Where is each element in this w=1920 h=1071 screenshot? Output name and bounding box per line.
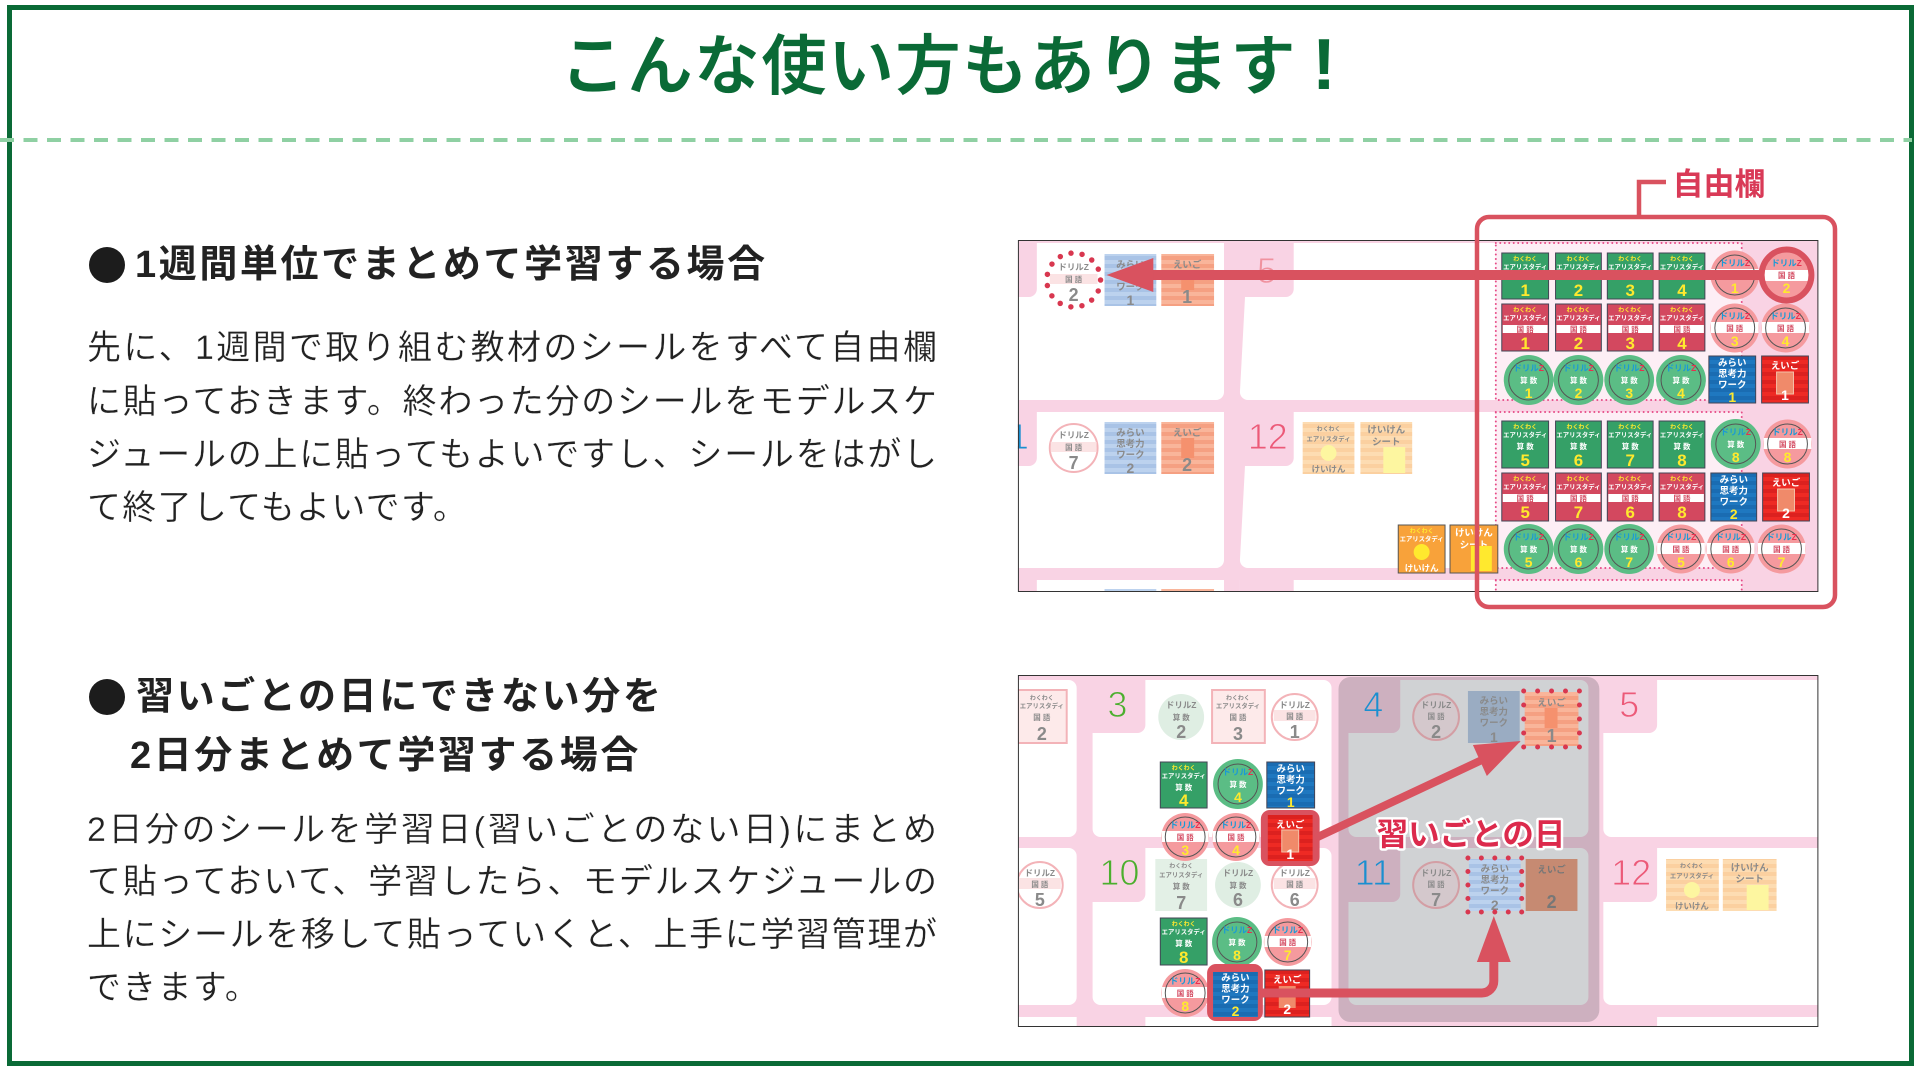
stickers row 3: green circles, blue and red: ドリルZ <box>1513 363 1544 373</box>
heading text line 2: 2日分まとめて学習する場合 <box>130 735 641 777</box>
heading text: 1週間単位でまとめて学習する場合 <box>135 244 768 286</box>
faded stickers row 1: 算 数 <box>1173 712 1190 722</box>
faded stickers in lesson day: 思考力 <box>1480 706 1508 718</box>
stickers moved: week 2: 算 数 <box>1228 937 1246 947</box>
faded stickers row 2: エアリスタディ <box>1670 871 1714 880</box>
stickers row 5: 国 語 <box>1622 494 1639 503</box>
stickers row 2: red workbook japanese: ドリルZ <box>1770 311 1801 321</box>
section 2 body text: できます。 <box>87 969 260 1007</box>
stickers row 2: red workbook japanese: 国 語 <box>1622 325 1639 334</box>
stickers moved: week 1: ドリルZ <box>1223 767 1253 777</box>
stickers row 4: 5 <box>1520 451 1530 470</box>
stickers row 2: red workbook japanese: エアリスタディ <box>1660 313 1704 322</box>
faded stickers row 1 <box>1018 690 1318 744</box>
faded stickers in lesson day: 国 語 <box>1428 712 1445 721</box>
stickers row 5 <box>1502 473 1809 522</box>
stickers moved: week 1: ワーク <box>1277 786 1305 797</box>
section 1 body text: に貼っておきます。終わった分のシールをモデルスケ <box>87 383 937 421</box>
faded stickers row 2 <box>1017 859 1777 913</box>
stickers row 4: ドリルZ <box>1720 427 1751 437</box>
faded stickers row 2: エアリスタディ <box>1159 870 1203 879</box>
stickers row 6: 算 数 <box>1520 544 1538 554</box>
faded stickers on schedule: ワーク <box>1116 450 1145 461</box>
section 1 body text <box>87 329 937 527</box>
title: こんな使い方もあります <box>560 29 1297 103</box>
stickers row 4: ドリルZ <box>1772 427 1803 437</box>
faded stickers row 1: わくわく <box>1030 694 1054 702</box>
faded stickers on schedule: 2 <box>1182 455 1192 475</box>
stickers row 5: わくわく <box>1567 475 1590 483</box>
stickers row 6: ドリルZ <box>1563 532 1594 542</box>
stickers moved: week 1: 算 数 <box>1229 779 1247 789</box>
stickers moved: week 2: 思考力 <box>1221 983 1250 995</box>
stickers row 3: green circles, blue and red: 1 <box>1781 387 1789 403</box>
stickers moved: week 2: 2 <box>1232 1003 1240 1019</box>
stickers row 4: 算 数 <box>1727 439 1745 449</box>
stickers row 1: green workbook math: エアリスタディ <box>1556 262 1600 271</box>
stickers row 5: わくわく <box>1670 475 1694 483</box>
stickers row 6: ドリルZ <box>1614 532 1644 542</box>
stickers row 2: red workbook japanese: わくわく <box>1567 306 1590 314</box>
faded stickers in lesson day: 2 <box>1491 897 1499 913</box>
faded stickers row 2: シート <box>1736 874 1764 885</box>
stickers row 3: green circles, blue and red: ドリルZ <box>1614 363 1644 373</box>
faded stickers on schedule: みらい <box>1116 428 1145 439</box>
faded stickers row 1: エアリスタディ <box>1216 701 1260 710</box>
stickers moved: week 2: わくわく <box>1172 920 1196 928</box>
faded stickers in lesson day: えいご <box>1537 697 1566 709</box>
stickers row 4: 算 数 <box>1517 441 1534 451</box>
faded stickers in lesson day: 1 <box>1490 729 1498 745</box>
stickers row 2: red workbook japanese: 国 語 <box>1570 325 1587 334</box>
stickers row 2: red workbook japanese: 1 <box>1520 334 1530 353</box>
stickers row 1: green workbook math: 2 <box>1574 281 1583 300</box>
stickers row 6: ドリルZ <box>1513 532 1544 542</box>
faded stickers row 2: 6 <box>1290 890 1300 910</box>
arrow: diagonal to lesson sticker 1 <box>1316 741 1521 838</box>
faded stickers row 2: けいけん <box>1731 863 1769 874</box>
stickers row 3: green circles, blue and red: 3 <box>1625 385 1633 401</box>
faded stickers row 2: 5 <box>1035 890 1045 910</box>
stickers row 5: エアリスタディ <box>1503 482 1547 491</box>
stickers row 4: 算 数 <box>1673 441 1691 451</box>
stickers row 1: green workbook math: エアリスタディ <box>1503 262 1547 271</box>
stickers row 6: 6 <box>1575 554 1583 570</box>
stickers row 2: red workbook japanese: わくわく <box>1670 306 1694 314</box>
stickers row 3: green circles, blue and red <box>1504 355 1808 405</box>
stickers row 6: 国 語 <box>1722 545 1740 554</box>
faded stickers in lesson day: ワーク <box>1480 718 1508 729</box>
faded stickers on schedule: わくわく <box>1317 425 1340 433</box>
stickers row 4: わくわく <box>1567 423 1590 431</box>
stickers moved: week 1: 国 語 <box>1227 833 1245 842</box>
stickers row 3: green circles, blue and red: 1 <box>1728 389 1736 405</box>
stickers moved: week 2: エアリスタディ <box>1162 927 1206 936</box>
faded stickers on schedule: エアリスタディ <box>1307 434 1351 443</box>
bullet <box>89 247 125 283</box>
section 1 body text: て終了してもよいです。 <box>87 489 468 527</box>
faded stickers row 2: 算 数 <box>1229 880 1247 890</box>
section 1 heading <box>89 244 768 286</box>
stickers row 4: エアリスタディ <box>1660 430 1704 439</box>
faded stickers on schedule: えいご <box>1173 427 1202 439</box>
stickers row 4 <box>1502 419 1812 470</box>
stickers row 5: えいご <box>1772 477 1801 489</box>
stickers row 4: わくわく <box>1670 423 1694 431</box>
stickers row 1: green workbook math: エアリスタディ <box>1660 262 1704 271</box>
stickers row 4: 7 <box>1626 451 1635 470</box>
panel: schedule with lesson day <box>1000 675 1826 1030</box>
stickers moved: week 1: わくわく <box>1172 764 1196 772</box>
stickers row 3: green circles, blue and red: 1 <box>1525 385 1533 401</box>
stickers row 3: green circles, blue and red: ドリルZ <box>1563 363 1594 373</box>
stickers row 2: red workbook japanese: エアリスタディ <box>1503 313 1547 322</box>
faded stickers row 2: 国 語 <box>1031 880 1049 889</box>
stickers row 3: green circles, blue and red: えいご <box>1771 360 1800 372</box>
faded stickers row 2: わくわく <box>1169 862 1193 870</box>
stickers moved: week 2: ドリルZ <box>1222 925 1252 935</box>
faded stickers in lesson day: えいご <box>1537 864 1566 876</box>
faded stickers in lesson day: 2 <box>1547 892 1557 912</box>
orange experience stickers: シート <box>1460 540 1488 551</box>
date numbers <box>1100 684 1651 893</box>
stickers row 2: red workbook japanese: 3 <box>1731 333 1739 349</box>
stickers row 4: エアリスタディ <box>1608 430 1652 439</box>
stickers row 3: green circles, blue and red: 算 数 <box>1621 375 1638 385</box>
orange experience stickers: けいけん <box>1455 528 1493 539</box>
section 2 body text: 2日分のシールを学習日(習いごとのない日)にまとめ <box>87 811 937 849</box>
stickers row 1: green workbook math: 国 語 <box>1778 271 1796 280</box>
date numbers: 1 <box>1009 416 1029 457</box>
date numbers: 4 <box>1363 684 1383 725</box>
stickers moved: week 1: えいご <box>1276 819 1305 831</box>
faded stickers row 2: ドリルZ <box>1223 868 1253 878</box>
date numbers <box>1018 258 1286 449</box>
faded stickers in lesson day: ドリルZ <box>1421 700 1451 710</box>
stickers row 4: エアリスタディ <box>1503 430 1547 439</box>
stickers row 3: green circles, blue and red: ワーク <box>1718 380 1746 391</box>
stickers row 3: green circles, blue and red: ドリルZ <box>1666 363 1696 373</box>
stickers row 1: green workbook math: わくわく <box>1618 255 1642 263</box>
stickers row 6 <box>1504 524 1806 574</box>
label: lesson day: 習いごとの日 <box>1377 816 1565 852</box>
stickers row 5: 2 <box>1730 506 1738 522</box>
date numbers: 5 <box>1619 684 1639 725</box>
stickers row 6: 算 数 <box>1570 544 1587 554</box>
stickers moved: week 2: 算 数 <box>1175 938 1193 948</box>
stickers row 2: red workbook japanese: 国 語 <box>1777 324 1795 333</box>
stickers moved: week 1: 1 <box>1286 846 1294 862</box>
stickers moved: week 2: 国 語 <box>1177 989 1194 998</box>
panel: schedule with free column <box>1000 240 1818 610</box>
bullet <box>89 679 125 715</box>
stickers row 6: ドリルZ <box>1715 532 1746 542</box>
stickers row 4: エアリスタディ <box>1556 430 1600 439</box>
stickers row 5: 国 語 <box>1673 494 1691 503</box>
section 2 heading <box>89 676 663 777</box>
stickers row 5: 国 語 <box>1570 494 1587 503</box>
date numbers: 5 <box>1257 250 1277 291</box>
faded stickers on schedule <box>1047 253 1412 597</box>
stickers row 2: red workbook japanese: 国 語 <box>1726 324 1744 333</box>
faded stickers on schedule: けいけん <box>1367 425 1406 436</box>
faded stickers row 2: 算 数 <box>1173 881 1190 891</box>
stickers row 1: green workbook math: わくわく <box>1670 255 1694 263</box>
stickers row 5: わくわく <box>1513 475 1537 483</box>
stickers row 5: 2 <box>1782 505 1790 521</box>
faded stickers row 1: 国 語 <box>1033 713 1051 722</box>
faded stickers on schedule: けいけん <box>1312 464 1346 474</box>
stickers row 1: green workbook math: 1 <box>1520 281 1530 300</box>
faded stickers row 1: 2 <box>1037 724 1047 744</box>
stickers row 6: ドリルZ <box>1666 532 1696 542</box>
faded stickers row 2: わくわく <box>1680 862 1704 870</box>
stickers row 6: 算 数 <box>1621 544 1638 554</box>
faded stickers on schedule: 国 語 <box>1065 443 1083 452</box>
faded stickers row 2: 6 <box>1233 890 1243 910</box>
faded stickers row 1: ドリルZ <box>1166 700 1196 710</box>
stickers row 4: 8 <box>1784 449 1792 465</box>
stickers row 5: 7 <box>1574 503 1583 522</box>
date numbers: 10 <box>1100 852 1139 893</box>
stickers row 1: green workbook math: 4 <box>1677 281 1687 300</box>
faded stickers in lesson day: みらい <box>1481 864 1509 875</box>
faded stickers on schedule: 2 <box>1069 285 1079 305</box>
section 1 body text: ジュールの上に貼ってもよいですし、シールをはがし <box>87 436 937 474</box>
faded stickers in lesson day: 思考力 <box>1481 874 1509 886</box>
orange experience stickers: わくわく <box>1410 527 1434 535</box>
stickers row 4: 算 数 <box>1622 441 1639 451</box>
stickers row 2: red workbook japanese: ドリルZ <box>1719 311 1750 321</box>
faded stickers on schedule: えいご <box>1173 259 1202 271</box>
stickers moved: week 2: 2 <box>1283 1001 1291 1017</box>
stickers row 2: red workbook japanese <box>1502 304 1810 353</box>
faded stickers in lesson day: 2 <box>1431 722 1441 742</box>
orange experience stickers: けいけん <box>1405 563 1439 573</box>
faded stickers in lesson day: ドリルZ <box>1421 868 1451 878</box>
stickers row 1: green workbook math <box>1502 250 1811 300</box>
faded stickers row 1: エアリスタディ <box>1020 701 1064 710</box>
stickers row 5: 5 <box>1520 503 1530 522</box>
heading text line 1: 習いごとの日にできない分を <box>136 676 663 718</box>
stickers moved: week 1: 4 <box>1179 791 1189 810</box>
stickers row 6: 7 <box>1625 554 1633 570</box>
stickers row 4: 8 <box>1732 449 1740 465</box>
stickers row 1: green workbook math: ドリルZ <box>1719 258 1750 268</box>
faded stickers row 2: 国 語 <box>1286 880 1304 889</box>
arrow: move sticker to schedule <box>1107 250 1811 300</box>
stickers moved: week 1: 4 <box>1232 842 1240 858</box>
stickers row 5: わくわく <box>1618 475 1642 483</box>
faded stickers row 1: わくわく <box>1226 694 1250 702</box>
stickers row 1: green workbook math: ドリルZ <box>1771 258 1802 268</box>
faded stickers row 1: 3 <box>1233 724 1243 744</box>
faded stickers row 2: ドリルZ <box>1279 868 1310 878</box>
faded stickers in lesson day: 国 語 <box>1428 880 1445 889</box>
faded stickers row 2: けいけん <box>1675 901 1709 911</box>
faded stickers row 1: 1 <box>1290 722 1300 742</box>
stickers row 1: green workbook math: わくわく <box>1567 255 1590 263</box>
section 2 body text <box>87 811 937 1007</box>
stickers row 5: 8 <box>1677 503 1687 522</box>
faded stickers on schedule: 1 <box>1182 287 1192 307</box>
stickers moved: week 1 <box>1160 759 1320 866</box>
stickers moved: week 1: 1 <box>1287 794 1295 810</box>
faded stickers row 1: ドリルZ <box>1279 700 1310 710</box>
stickers moved: week 1: 4 <box>1234 789 1242 805</box>
faded stickers in lesson day <box>1413 691 1579 913</box>
stickers row 2: red workbook japanese: エアリスタディ <box>1556 313 1600 322</box>
stickers moved: week 1: ドリルZ <box>1170 820 1200 830</box>
stickers row 3: green circles, blue and red: 算 数 <box>1673 375 1690 385</box>
section 2 body text: 上にシールを移して貼っていくと、上手に学習管理が <box>87 916 937 954</box>
stickers moved: week 2 <box>1160 917 1312 1021</box>
stickers moved: week 2: ドリルZ <box>1170 976 1200 986</box>
stickers row 1: green workbook math: 2 <box>1783 280 1791 296</box>
faded stickers in lesson day: ワーク <box>1481 886 1509 897</box>
section 2 body text: て貼っておいて、学習したら、モデルスケジュールの <box>87 863 937 901</box>
dashed divider under title <box>0 138 1912 142</box>
stickers row 2: red workbook japanese: 3 <box>1626 334 1635 353</box>
stickers row 1: green workbook math: 1 <box>1731 280 1739 296</box>
stickers moved: week 2: みらい <box>1221 973 1250 984</box>
stickers row 2: red workbook japanese: 国 語 <box>1517 325 1534 334</box>
stickers moved: week 2: ワーク <box>1221 995 1250 1006</box>
stickers moved: week 2: 7 <box>1284 947 1292 963</box>
faded stickers in lesson day: 1 <box>1547 726 1557 746</box>
stickers row 2: red workbook japanese: 国 語 <box>1673 325 1691 334</box>
stickers moved: week 1: みらい <box>1277 764 1305 775</box>
stickers row 1: green workbook math: 3 <box>1626 281 1635 300</box>
faded stickers on schedule: みらい <box>1116 260 1145 271</box>
stickers row 3: green circles, blue and red: みらい <box>1718 358 1746 369</box>
stickers moved: week 2: 国 語 <box>1279 938 1297 947</box>
faded stickers on schedule: 思考力 <box>1116 270 1145 282</box>
faded stickers row 1: 国 語 <box>1229 713 1247 722</box>
faded stickers row 2: ドリルZ <box>1025 868 1055 878</box>
stickers row 1: green workbook math: エアリスタディ <box>1608 262 1652 271</box>
stickers row 5: エアリスタディ <box>1608 482 1652 491</box>
stickers moved: week 1: 思考力 <box>1277 774 1305 786</box>
faded stickers in lesson day: みらい <box>1480 696 1508 707</box>
stickers row 5: エアリスタディ <box>1660 482 1704 491</box>
faded stickers in lesson day: 7 <box>1431 890 1441 910</box>
stickers row 2: red workbook japanese: わくわく <box>1513 306 1537 314</box>
stickers row 4: 8 <box>1677 451 1687 470</box>
stickers row 6: 国 語 <box>1773 545 1791 554</box>
stickers row 6: 5 <box>1525 554 1533 570</box>
stickers row 6: ドリルZ <box>1766 532 1797 542</box>
stickers moved: week 2: えいご <box>1273 974 1302 986</box>
stickers row 2: red workbook japanese: 4 <box>1782 333 1790 349</box>
faded stickers on schedule: 2 <box>1127 460 1135 476</box>
faded stickers row 1: 2 <box>1176 722 1186 742</box>
date numbers: 3 <box>1108 684 1127 725</box>
stickers row 5: 思考力 <box>1720 485 1748 497</box>
stickers row 2: red workbook japanese: 4 <box>1677 334 1687 353</box>
orange experience stickers: エアリスタディ <box>1400 534 1444 543</box>
date numbers: 12 <box>1611 852 1651 893</box>
orange experience stickers <box>1398 525 1498 573</box>
stickers row 5: ワーク <box>1720 497 1748 508</box>
faded stickers row 2: 7 <box>1176 893 1186 913</box>
stickers moved: week 1: 国 語 <box>1177 833 1194 842</box>
stickers row 5: エアリスタディ <box>1556 482 1600 491</box>
stickers row 6: 国 語 <box>1673 545 1690 554</box>
stickers row 6: 6 <box>1727 554 1735 570</box>
stickers row 6: 7 <box>1778 554 1786 570</box>
stickers moved: week 1: ドリルZ <box>1221 820 1251 830</box>
title: ! <box>1312 25 1336 105</box>
callout: free column outline <box>1477 167 1835 607</box>
stickers moved: week 1: エアリスタディ <box>1162 771 1206 780</box>
faded stickers on schedule: 1 <box>1127 292 1135 308</box>
stickers moved: week 2: 8 <box>1233 947 1241 963</box>
faded stickers on schedule: ドリルZ <box>1058 262 1089 272</box>
faded stickers on schedule: ワーク <box>1116 282 1145 293</box>
stickers row 6: 5 <box>1677 554 1685 570</box>
faded stickers on schedule: シート <box>1372 437 1400 448</box>
stickers row 4: わくわく <box>1618 423 1642 431</box>
stickers row 2: red workbook japanese: わくわく <box>1618 306 1642 314</box>
stickers row 5: 国 語 <box>1517 494 1534 503</box>
faded stickers on schedule: 国 語 <box>1065 275 1083 284</box>
stickers row 3: green circles, blue and red: 2 <box>1575 385 1583 401</box>
stickers row 4: 6 <box>1574 451 1583 470</box>
gray highlight: lesson day column <box>1339 677 1599 1022</box>
stickers row 4: わくわく <box>1513 423 1537 431</box>
faded stickers on schedule: ドリルZ <box>1058 430 1089 440</box>
stickers moved: week 2: 8 <box>1181 998 1189 1014</box>
faded stickers row 1: 国 語 <box>1286 712 1304 721</box>
date numbers: 12 <box>1248 416 1288 457</box>
stickers row 2: red workbook japanese: 2 <box>1574 334 1583 353</box>
faded stickers on schedule: 思考力 <box>1116 438 1145 450</box>
stickers row 4: 国 語 <box>1779 440 1797 449</box>
stickers row 3: green circles, blue and red: 算 数 <box>1520 375 1538 385</box>
stickers row 5: みらい <box>1720 475 1748 486</box>
callout: free column outline: 自由欄 <box>1672 167 1766 202</box>
stickers row 2: red workbook japanese: エアリスタディ <box>1608 313 1652 322</box>
stickers row 4: 算 数 <box>1570 441 1587 451</box>
stickers moved: week 2: ドリルZ <box>1272 925 1303 935</box>
stickers moved: week 1: 3 <box>1181 842 1189 858</box>
stickers row 5: 6 <box>1626 503 1635 522</box>
stickers row 3: green circles, blue and red: 算 数 <box>1570 375 1587 385</box>
section 1 body text: 先に、1週間で取り組む教材のシールをすべて自由欄 <box>87 329 937 367</box>
stickers row 3: green circles, blue and red: 思考力 <box>1718 368 1746 380</box>
arrow: elbow to lesson sticker 2 <box>1261 916 1511 993</box>
stickers row 1: green workbook math: わくわく <box>1513 255 1537 263</box>
stickers moved: week 1: 算 数 <box>1175 782 1193 792</box>
stickers row 3: green circles, blue and red: 4 <box>1677 385 1685 401</box>
date numbers: 11 <box>1355 852 1392 893</box>
faded stickers on schedule: 7 <box>1069 453 1079 473</box>
stickers moved: week 2: 8 <box>1179 948 1188 967</box>
